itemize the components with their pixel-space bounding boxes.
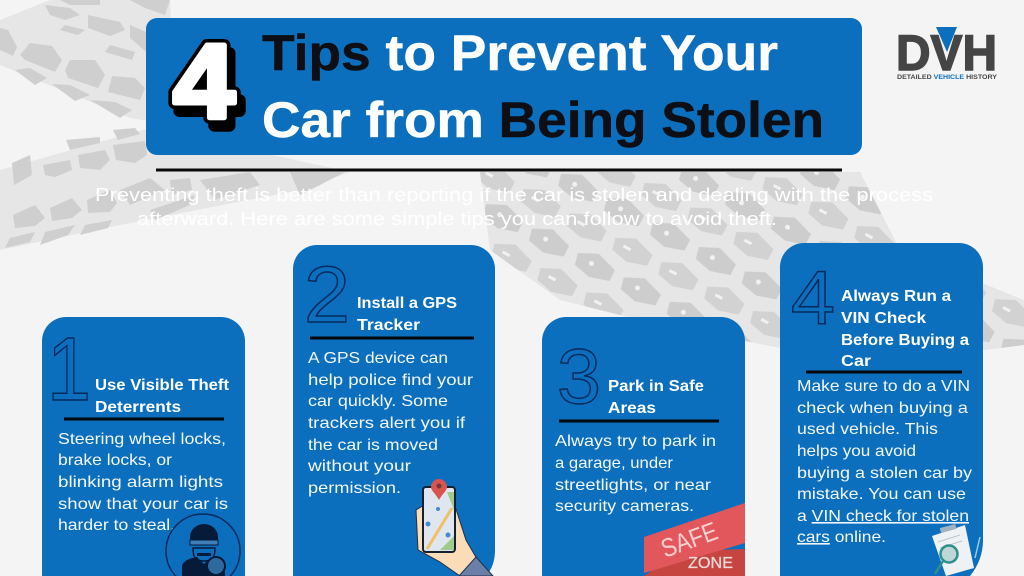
intro text: afterward. Here are some simple tips you can follow to avoid theft. [137, 209, 777, 229]
body: a VIN check for stolen [797, 508, 969, 525]
panel: tip 1 [42, 317, 245, 576]
heading: Car [841, 353, 871, 370]
body: Make sure to do a VIN [797, 378, 970, 395]
number 4: 4 [791, 256, 835, 341]
intro text: Preventing theft is better than reporting if the car is stolen and dealing with the process [95, 185, 933, 205]
heading [608, 378, 704, 417]
big number 4: 4 [178, 31, 240, 149]
body: security cameras. [555, 498, 694, 515]
panel: tip 4 [780, 243, 983, 576]
body: a garage, under [555, 455, 674, 472]
heading: Before Buying a [841, 332, 969, 349]
intro text [95, 185, 933, 229]
panel: tip 2 [293, 245, 495, 576]
heading [95, 377, 230, 416]
body [797, 378, 972, 546]
heading: VIN Check [841, 310, 926, 327]
number 2: 2 [304, 250, 350, 339]
icon: safe zone sign: ZONE [688, 555, 733, 572]
icon: clipboard with magnifier [932, 524, 980, 576]
logo: DVH: DETAILED VEHICLE HISTORY [897, 74, 998, 81]
heading: Always Run a [841, 288, 951, 305]
body: A GPS device can [308, 350, 448, 367]
heading: Tracker [357, 317, 420, 334]
body: brake locks, or [58, 452, 173, 469]
body: permission. [308, 480, 401, 497]
icon: safe zone sign: SAFE [657, 516, 722, 564]
big number 4: 4 [173, 23, 235, 141]
heading [841, 288, 969, 370]
body: show that your car is [58, 496, 228, 513]
body [307, 350, 474, 497]
body: Always try to park in [555, 433, 716, 450]
title line 2: Car from Being Stolen [262, 92, 824, 148]
number 1: 1 [47, 320, 91, 420]
big number 4: 4 [173, 23, 235, 141]
body: mistake. You can use [797, 486, 966, 503]
body: the car is moved [308, 437, 438, 454]
divider under title [156, 168, 842, 172]
title line 1: Tips to Prevent Your [262, 25, 778, 81]
title banner [146, 18, 862, 155]
body: cars online. [797, 529, 886, 546]
panel: tip 3 [542, 317, 745, 576]
body [58, 431, 228, 534]
logo: DVH: DVH [896, 25, 997, 81]
body [555, 433, 716, 515]
body: blinking alarm lights [58, 474, 223, 491]
body: buying a stolen car by [797, 465, 972, 482]
icon: thief [166, 514, 240, 576]
body: car quickly. Some [308, 393, 448, 410]
body: Steering wheel locks, [58, 431, 226, 448]
icon: safe zone sign [644, 503, 745, 576]
heading: Areas [608, 400, 656, 417]
icon: phone with map in hand [416, 479, 493, 576]
heading: Install a GPS [357, 295, 457, 312]
body: harder to steal. [58, 517, 175, 534]
heading: Use Visible Theft [95, 377, 230, 394]
heading: Park in Safe [608, 378, 704, 395]
heading [357, 295, 457, 334]
body: check when buying a [797, 400, 968, 417]
heading: Deterrents [95, 399, 181, 416]
number 3: 3 [557, 332, 601, 420]
body: used vehicle. This [797, 421, 938, 438]
body: streetlights, or near [555, 477, 712, 494]
body: help police find your [308, 372, 474, 389]
body: helps you avoid [797, 443, 916, 460]
body: without your [307, 458, 412, 475]
body: trackers alert you if [308, 415, 466, 432]
